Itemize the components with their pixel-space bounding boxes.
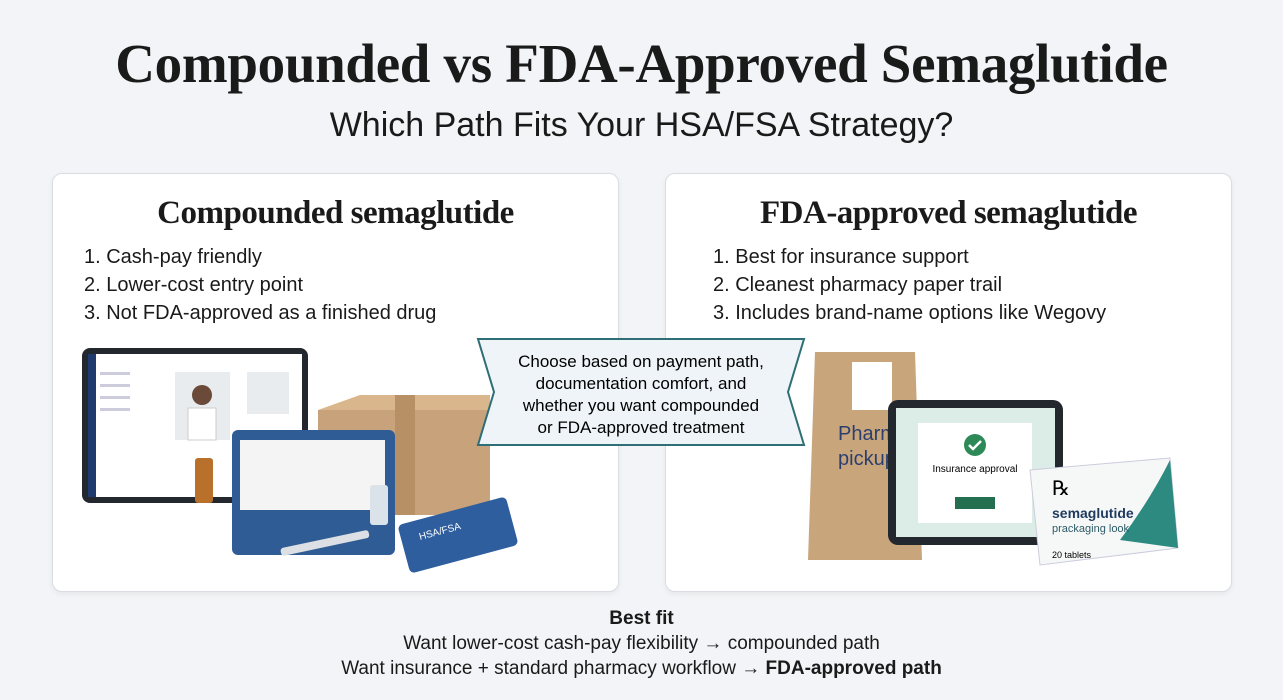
illustration: pharmacy pickup: ℞	[1052, 478, 1070, 500]
list: FDA points: 3. Includes brand-name options like Wegovy	[713, 302, 1106, 324]
list: compounded points	[84, 246, 436, 324]
illustration: telehealth kit	[82, 348, 518, 572]
text: best fit summary: Want lower-cost cash-pay flexibility → compounded path	[403, 633, 880, 654]
illustration: pharmacy pickup: 20 tablets	[1052, 550, 1092, 560]
text: best fit summary	[341, 608, 942, 679]
list: FDA points: 2. Cleanest pharmacy paper trail	[713, 274, 1002, 296]
list: FDA points: 1. Best for insurance support	[713, 246, 969, 268]
callout: choose based on: documentation comfort, and	[536, 374, 746, 393]
list: compounded points: 1. Cash-pay friendly	[84, 246, 262, 268]
text: best fit summary: Best fit	[609, 608, 674, 629]
illustration: telehealth kit: HSA/FSA	[418, 521, 462, 543]
callout: choose based on: or FDA-approved treatment	[538, 418, 745, 437]
illustration: pharmacy pickup: prackaging look	[1052, 523, 1130, 535]
illustration: pharmacy pickup: semaglutide	[1052, 505, 1134, 521]
callout: choose based on	[476, 338, 806, 446]
illustration: pharmacy pickup	[808, 352, 1178, 566]
list: compounded points: 2. Lower-cost entry point	[84, 274, 303, 296]
panel: compounded	[52, 173, 619, 592]
callout: choose based on: whether you want compounded	[522, 396, 759, 415]
subtitle: Which Path Fits Your HSA/FSA Strategy?	[330, 106, 953, 144]
heading: compounded: Compounded semaglutide	[157, 195, 514, 231]
illustration: pharmacy pickup: pickup	[838, 448, 896, 470]
panel: FDA-approved	[665, 173, 1232, 592]
callout: choose based on: Choose based on payment path,	[518, 352, 764, 371]
title: Compounded vs FDA-Approved Semaglutide	[115, 33, 1168, 94]
text: best fit summary: Want insurance + standard pharmacy workflow → FDA-approved path	[341, 658, 942, 679]
list: FDA points	[713, 246, 1106, 324]
heading: FDA-approved: FDA-approved semaglutide	[760, 195, 1137, 231]
illustration: pharmacy pickup: Pharm	[838, 423, 897, 445]
list: compounded points: 3. Not FDA-approved as a finished drug	[84, 302, 436, 324]
illustration: pharmacy pickup: Insurance approval	[932, 464, 1018, 475]
